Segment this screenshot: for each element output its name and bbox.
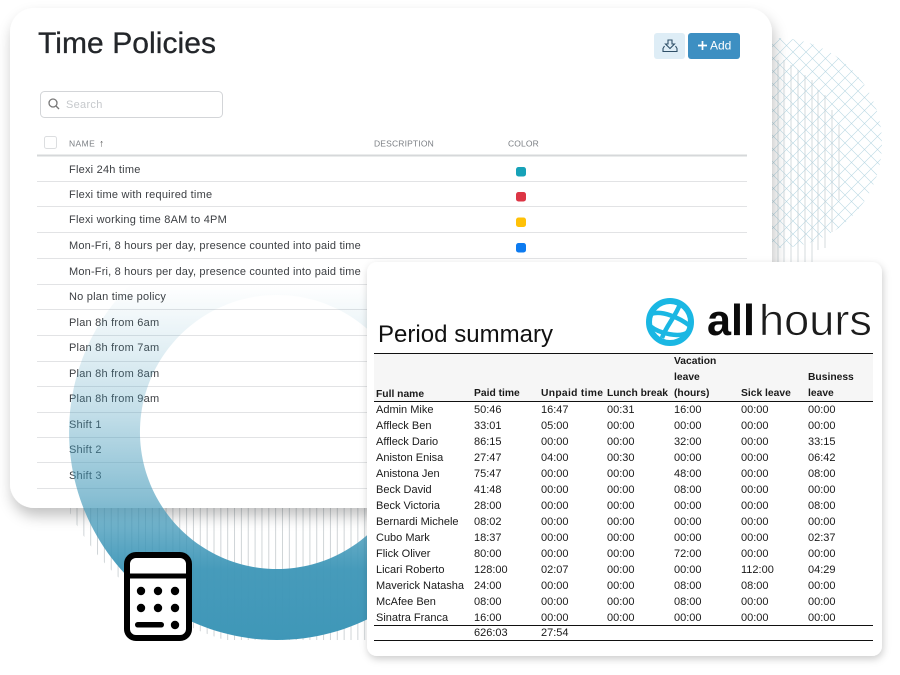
policy rows: Plan 8h from 7am xyxy=(69,342,159,354)
table rows: 00:00 xyxy=(741,484,769,496)
table rows: 08:00 xyxy=(674,596,702,608)
table rows: 08:00 xyxy=(674,580,702,592)
table rows: 05:00 xyxy=(541,420,569,432)
table rows: 00:00 xyxy=(741,468,769,480)
table rows: 00:00 xyxy=(808,612,836,624)
table rows: 28:00 xyxy=(474,500,502,512)
panel: time policies xyxy=(10,8,772,508)
table header: NAME xyxy=(69,138,95,148)
table rows: 33:15 xyxy=(808,436,836,448)
table rows: 00:00 xyxy=(541,468,569,480)
table rows: 06:42 xyxy=(808,452,836,464)
table rows: 24:00 xyxy=(474,580,502,592)
table rows: 04:00 xyxy=(541,452,569,464)
table rows: 00:00 xyxy=(607,596,635,608)
icon: calculator xyxy=(127,555,189,638)
table rows: 00:00 xyxy=(607,468,635,480)
table rows: 00:00 xyxy=(541,516,569,528)
table rows: Beck David xyxy=(376,484,432,496)
table rows: 75:47 xyxy=(474,468,502,480)
summary table xyxy=(374,354,873,640)
table rows: 00:00 xyxy=(674,452,702,464)
policy rows: Plan 8h from 6am xyxy=(69,317,159,329)
table header: leave xyxy=(808,388,834,399)
table rows: Licari Roberto xyxy=(376,564,444,576)
table rows: 08:00 xyxy=(474,596,502,608)
table rows: 00:00 xyxy=(541,436,569,448)
table rows: 00:00 xyxy=(607,612,635,624)
table rows: 18:37 xyxy=(474,532,502,544)
table header: Vacation xyxy=(674,356,716,367)
table rows: 00:00 xyxy=(541,532,569,544)
policy rows: Plan 8h from 9am xyxy=(69,393,159,405)
table rows: 00:00 xyxy=(674,516,702,528)
table rows: 00:00 xyxy=(607,516,635,528)
panel: period summary xyxy=(367,262,882,656)
table rows: 128:00 xyxy=(474,564,508,576)
table rows: Beck Victoria xyxy=(376,500,441,512)
table rows: 00:00 xyxy=(607,420,635,432)
table rows: 00:00 xyxy=(607,436,635,448)
table header: Sick leave xyxy=(741,388,791,399)
table rows: 00:00 xyxy=(541,596,569,608)
table header: (hours) xyxy=(674,388,709,399)
policy rows: No plan time policy xyxy=(69,291,166,303)
table totals: 27:54 xyxy=(541,627,569,639)
table rows: Affleck Dario xyxy=(376,436,438,448)
table rows: 48:00 xyxy=(674,468,702,480)
table rows: 08:00 xyxy=(741,580,769,592)
policy rows: Mon-Fri, 8 hours per day, presence counted into paid time xyxy=(69,240,361,252)
table rows: 00:00 xyxy=(808,404,836,416)
table rows: McAfee Ben xyxy=(376,596,436,608)
table rows xyxy=(376,404,836,624)
table rows: 08:02 xyxy=(474,516,502,528)
table rows: 00:00 xyxy=(741,404,769,416)
button: add: Add xyxy=(710,38,731,52)
color swatches xyxy=(516,167,526,252)
table rows: 00:00 xyxy=(674,612,702,624)
table rows: 00:00 xyxy=(808,596,836,608)
policy rows: Shift 3 xyxy=(69,470,102,482)
table header: Business xyxy=(808,372,854,383)
table rows: 00:00 xyxy=(541,548,569,560)
table rows: 33:01 xyxy=(474,420,502,432)
table header: ↑ xyxy=(99,138,104,150)
vertical line circle background xyxy=(70,500,370,640)
table rows: 00:00 xyxy=(741,516,769,528)
table header: Full name xyxy=(376,389,424,400)
table rows: 16:00 xyxy=(474,612,502,624)
table rows: 00:00 xyxy=(674,564,702,576)
policy rows xyxy=(69,164,361,482)
table rows: 00:00 xyxy=(741,436,769,448)
table header: Paid time xyxy=(474,388,520,399)
logo: allhours: hours xyxy=(759,296,872,345)
table rows: 80:00 xyxy=(474,548,502,560)
table rows: 112:00 xyxy=(741,564,774,576)
heading: time policies: Time Policies xyxy=(38,27,216,60)
table rows: Aniston Enisa xyxy=(376,452,444,464)
policy rows: Plan 8h from 8am xyxy=(69,368,159,380)
search box: Search xyxy=(66,99,103,111)
table rows: 50:46 xyxy=(474,404,502,416)
table rows: 08:00 xyxy=(674,484,702,496)
logo: allhours: all xyxy=(707,296,755,345)
table rows: 00:00 xyxy=(607,500,635,512)
table rows: 00:30 xyxy=(607,452,635,464)
table rows: 00:00 xyxy=(674,500,702,512)
table rows: 72:00 xyxy=(674,548,702,560)
table rows: Affleck Ben xyxy=(376,420,431,432)
policy rows: Flexi time with required time xyxy=(69,189,212,201)
table rows: Anistona Jen xyxy=(376,468,440,480)
table rows: 00:00 xyxy=(541,580,569,592)
table rows: 00:00 xyxy=(607,580,635,592)
table header: leave xyxy=(674,372,700,383)
table rows: 16:47 xyxy=(541,404,569,416)
table rows: 00:00 xyxy=(674,532,702,544)
table rows: 41:48 xyxy=(474,484,502,496)
table rows: 00:00 xyxy=(741,548,769,560)
table rows: 04:29 xyxy=(808,564,836,576)
table totals: 626:03 xyxy=(474,627,508,639)
table rows: 00:00 xyxy=(607,564,635,576)
table totals xyxy=(474,627,569,639)
table header: COLOR xyxy=(508,138,539,148)
search box xyxy=(40,92,222,118)
table rows: 02:37 xyxy=(808,532,836,544)
table rows: 00:00 xyxy=(607,484,635,496)
table rows: 00:00 xyxy=(741,532,769,544)
policy rows: Flexi working time 8AM to 4PM xyxy=(69,214,227,226)
table rows: 00:00 xyxy=(808,580,836,592)
table rows: 32:00 xyxy=(674,436,702,448)
policy rows: Shift 1 xyxy=(69,419,102,431)
table rows: Maverick Natasha xyxy=(376,580,465,592)
table rows: 00:00 xyxy=(607,532,635,544)
table rows: 00:00 xyxy=(541,612,569,624)
table rows: Cubo Mark xyxy=(376,532,430,544)
table rows: Flick Oliver xyxy=(376,548,431,560)
table header: Lunch break xyxy=(607,388,668,399)
table rows: Sinatra Franca xyxy=(376,612,449,624)
button: add xyxy=(688,33,740,59)
table rows: 00:00 xyxy=(541,484,569,496)
table rows: 00:31 xyxy=(607,404,635,416)
table rows: 00:00 xyxy=(808,548,836,560)
table rows: 86:15 xyxy=(474,436,502,448)
policy rows: Mon-Fri, 8 hours per day, presence counted into paid time xyxy=(69,266,361,278)
hatched circle background xyxy=(772,38,882,262)
table rows: Admin Mike xyxy=(376,404,433,416)
table rows: 16:00 xyxy=(674,404,702,416)
policy rows: Flexi 24h time xyxy=(69,164,141,176)
table rows: 00:00 xyxy=(741,596,769,608)
table rows: 00:00 xyxy=(741,452,769,464)
table rows: 00:00 xyxy=(541,500,569,512)
table rows: 00:00 xyxy=(741,420,769,432)
table rows: 00:00 xyxy=(808,516,836,528)
policy rows: Shift 2 xyxy=(69,444,102,456)
table rows: 02:07 xyxy=(541,564,569,576)
table rows: 00:00 xyxy=(674,420,702,432)
table header xyxy=(44,136,539,150)
table rows: 08:00 xyxy=(808,500,836,512)
table header xyxy=(376,356,854,400)
table rows: 00:00 xyxy=(741,500,769,512)
table header: DESCRIPTION xyxy=(374,138,434,148)
table rows: 27:47 xyxy=(474,452,502,464)
heading: period summary: Period summary xyxy=(378,321,553,348)
table rows: 08:00 xyxy=(808,468,836,480)
logo: allhours xyxy=(649,296,872,345)
table rows: 00:00 xyxy=(741,612,769,624)
table rows: 00:00 xyxy=(808,484,836,496)
table header: Unpaid time xyxy=(541,388,603,399)
table rows: 00:00 xyxy=(607,548,635,560)
table rows: Bernardi Michele xyxy=(376,516,459,528)
button: export xyxy=(654,33,685,59)
table rows: 00:00 xyxy=(808,420,836,432)
teal ring xyxy=(69,224,485,640)
